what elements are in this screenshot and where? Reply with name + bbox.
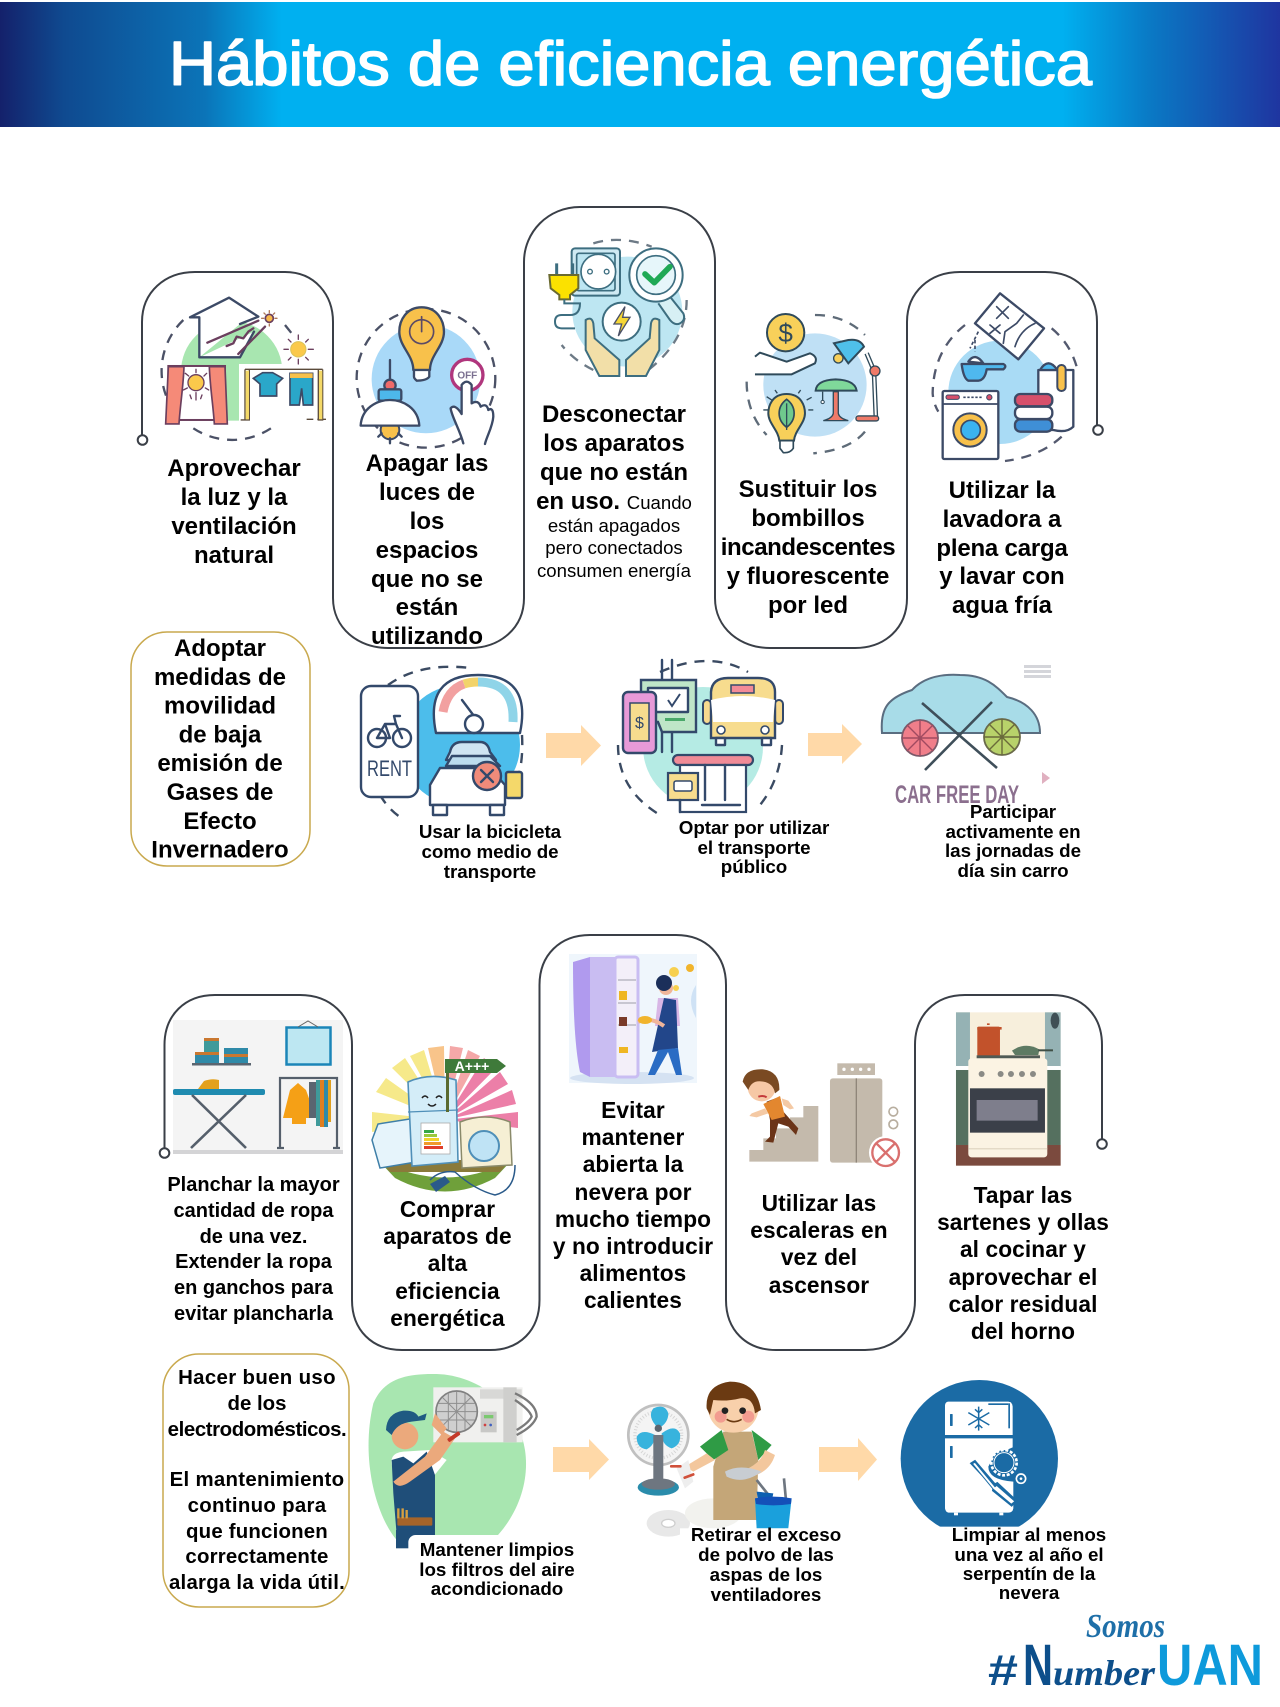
label: Tapar las	[974, 1182, 1072, 1208]
label: Aprovechar	[167, 455, 301, 482]
illustration: boy on stairs beside blocked elevator	[743, 1063, 902, 1169]
illustration: technician cleaning air conditioner	[369, 1374, 538, 1575]
arrow	[546, 725, 601, 766]
panel: stairs	[743, 1063, 902, 1298]
title: Hábitos de eficiencia energética	[169, 30, 1093, 99]
label: público	[721, 856, 787, 877]
logo: Somos #NumberUAN: Somos	[1086, 1608, 1165, 1645]
label: aprovechar el	[949, 1264, 1097, 1290]
label: Utilizar las	[762, 1190, 876, 1216]
callout: appliance care: electrodomésticos.	[168, 1419, 346, 1441]
label: acondicionado	[431, 1578, 563, 1599]
label: de una vez.	[200, 1226, 307, 1248]
label: como medio de	[421, 841, 559, 862]
label: nevera	[999, 1582, 1060, 1603]
step: fridge coil	[893, 1380, 1106, 1603]
logo: Somos #NumberUAN: N	[1023, 1633, 1053, 1698]
label: ventiladores	[711, 1584, 821, 1605]
label: cantidad de ropa	[173, 1200, 334, 1222]
label: mucho tiempo	[555, 1206, 711, 1232]
label: aspas de los	[710, 1564, 822, 1585]
icon: crossed-out car: CAR FREE DAY	[895, 781, 1019, 809]
label: Participar	[970, 801, 1057, 822]
step: fan blades	[628, 1382, 877, 1605]
illustration: ironing room	[173, 1020, 343, 1154]
logo: Somos #NumberUAN: UAN	[1157, 1633, 1263, 1698]
illustration: stove with pot and pan	[956, 1012, 1061, 1166]
callout: low-emission mobility: Adoptar	[174, 635, 266, 662]
step: car free day	[882, 665, 1081, 881]
label: Comprar	[400, 1196, 495, 1222]
illustration: energy-efficient appliances: A+++	[455, 1058, 489, 1074]
label: están apagados	[548, 515, 680, 536]
label: Utilizar la	[949, 477, 1056, 504]
panel: pans and residual heat	[937, 1012, 1109, 1344]
label: evitar plancharla	[174, 1303, 334, 1325]
icon: bulb, lamp and off button	[357, 307, 495, 448]
label: Sustituir los	[739, 476, 877, 503]
icon: bike rental, gauge and cars: RENT	[367, 756, 412, 781]
icon: bulb, lamp and off button: OFF	[457, 371, 477, 382]
arrow	[808, 724, 862, 764]
label: Optar por utilizar	[679, 817, 830, 838]
logo: Somos #NumberUAN: #	[988, 1646, 1018, 1695]
icon: coin, lamps and leaf bulb: $	[778, 318, 793, 348]
outline: lower row connected panels	[160, 935, 1107, 1350]
step: air filters	[369, 1374, 609, 1599]
callout: appliance care: continuo para	[188, 1495, 327, 1517]
arrow	[819, 1438, 877, 1481]
label: luces de	[379, 479, 475, 506]
panel: ironing	[167, 1020, 343, 1325]
callout: appliance care: que funcionen	[186, 1521, 328, 1543]
panel: natural light and ventilation	[162, 298, 327, 569]
label: en ganchos para	[174, 1277, 334, 1299]
label: las jornadas de	[945, 840, 1081, 861]
label: al cocinar y	[960, 1236, 1086, 1262]
callout: low-emission mobility: Efecto	[183, 808, 257, 835]
logo: Somos #NumberUAN	[988, 1608, 1263, 1698]
callout: low-emission mobility	[131, 632, 310, 866]
label: energética	[390, 1305, 505, 1331]
icon: ticket, kiosk, bus and bus stop: $	[635, 715, 644, 732]
label: Usar la bicicleta	[419, 821, 562, 842]
illustration: woman at open fridge	[569, 954, 697, 1084]
step: bicycle	[361, 667, 601, 882]
step: public transport	[618, 660, 862, 877]
label: incandescentes	[721, 534, 895, 561]
panel: disconnect devices	[536, 240, 692, 581]
label: agua fría	[952, 592, 1053, 619]
icon: coin, lamps and leaf bulb	[747, 314, 880, 453]
label: en uso. Cuando	[536, 488, 692, 515]
title banner	[0, 2, 1280, 127]
icon: bike rental, gauge and cars	[361, 667, 522, 820]
label: bombillos	[751, 505, 865, 532]
label: los	[410, 508, 444, 535]
logo: Somos #NumberUAN: umber	[1053, 1653, 1156, 1693]
label: por led	[768, 592, 848, 619]
callout: appliance care: Hacer buen uso	[178, 1367, 336, 1389]
label: nevera por	[574, 1179, 692, 1205]
icon: washer, detergent and towels	[933, 293, 1077, 461]
label: consumen energía	[537, 560, 692, 581]
label: y fluorescente	[727, 563, 889, 590]
label: una vez al año el	[954, 1544, 1104, 1565]
illustration: boy cleaning fan	[628, 1382, 813, 1568]
illustration: energy-efficient appliances	[372, 1046, 518, 1195]
label: del horno	[971, 1318, 1075, 1344]
label: alta	[428, 1250, 468, 1276]
callout: low-emission mobility: medidas de	[154, 664, 286, 691]
icon: socket, plug, magnifier and hands	[549, 240, 687, 376]
label: lavadora a	[943, 506, 1062, 533]
callout: low-emission mobility: movilidad	[164, 692, 276, 720]
callout: low-emission mobility: Gases de	[167, 779, 273, 806]
label: los aparatos	[543, 430, 685, 457]
callout: appliance care: alarga la vida útil.	[169, 1572, 345, 1594]
label: aparatos de	[383, 1223, 512, 1249]
label: utilizando	[371, 623, 483, 650]
label: Desconectar	[542, 401, 686, 428]
label: que no están	[540, 459, 688, 486]
label: y lavar con	[939, 563, 1065, 590]
label: alimentos	[580, 1260, 686, 1286]
label: ventilación	[171, 513, 297, 540]
label: ascensor	[769, 1272, 869, 1298]
label: que no se	[371, 566, 483, 593]
label: Evitar	[601, 1097, 665, 1123]
icon: crossed-out car	[882, 665, 1051, 809]
label: los filtros del aire	[419, 1559, 575, 1580]
label: vez del	[781, 1244, 857, 1270]
label: la luz y la	[181, 484, 288, 511]
label: y no introducir	[553, 1233, 713, 1259]
label: de polvo de las	[698, 1544, 834, 1565]
label: escaleras en	[750, 1217, 888, 1243]
label: día sin carro	[957, 860, 1069, 881]
label: mantener	[582, 1124, 685, 1150]
label: el transporte	[697, 837, 811, 858]
label: calientes	[584, 1287, 682, 1313]
label: eficiencia	[395, 1278, 500, 1304]
label: Limpiar al menos	[952, 1524, 1106, 1545]
icon: ticket, kiosk, bus and bus stop	[618, 660, 783, 815]
label: sartenes y ollas	[937, 1209, 1109, 1235]
callout: appliance care: El mantenimiento	[170, 1469, 344, 1491]
arrow	[553, 1439, 609, 1480]
panel: replace bulbs with led	[721, 314, 895, 619]
panel: efficient appliances	[372, 1046, 518, 1331]
label: Apagar las	[366, 450, 488, 477]
panel: fridge door	[553, 954, 713, 1313]
panel: turn off lights	[357, 307, 495, 650]
callout: low-emission mobility: emisión de	[157, 750, 283, 777]
callout: appliance care	[163, 1354, 349, 1607]
icon: house, window and clothesline	[162, 298, 327, 440]
label: calor residual	[949, 1291, 1097, 1317]
label: transporte	[444, 861, 536, 882]
callout: appliance care: correctamente	[185, 1546, 329, 1568]
label: Planchar la mayor	[167, 1174, 340, 1196]
panel: washing machine	[933, 293, 1077, 619]
label: pero conectados	[545, 537, 683, 558]
icon: refrigerator maintenance badge	[893, 1380, 1067, 1543]
label: Mantener limpios	[420, 1539, 574, 1560]
label: plena carga	[936, 535, 1068, 562]
outline: top row connected panels	[138, 207, 1103, 648]
label: espacios	[376, 537, 478, 564]
label: activamente en	[945, 821, 1081, 842]
callout: low-emission mobility: de baja	[179, 722, 262, 748]
label: serpentín de la	[963, 1563, 1096, 1584]
label: abierta la	[583, 1151, 684, 1177]
label: natural	[194, 542, 274, 569]
callout: appliance care: de los	[228, 1393, 286, 1415]
label: están	[396, 594, 458, 621]
callout: low-emission mobility: Invernadero	[151, 836, 289, 864]
label: Extender la ropa	[175, 1251, 333, 1273]
label: Retirar el exceso	[691, 1524, 841, 1545]
